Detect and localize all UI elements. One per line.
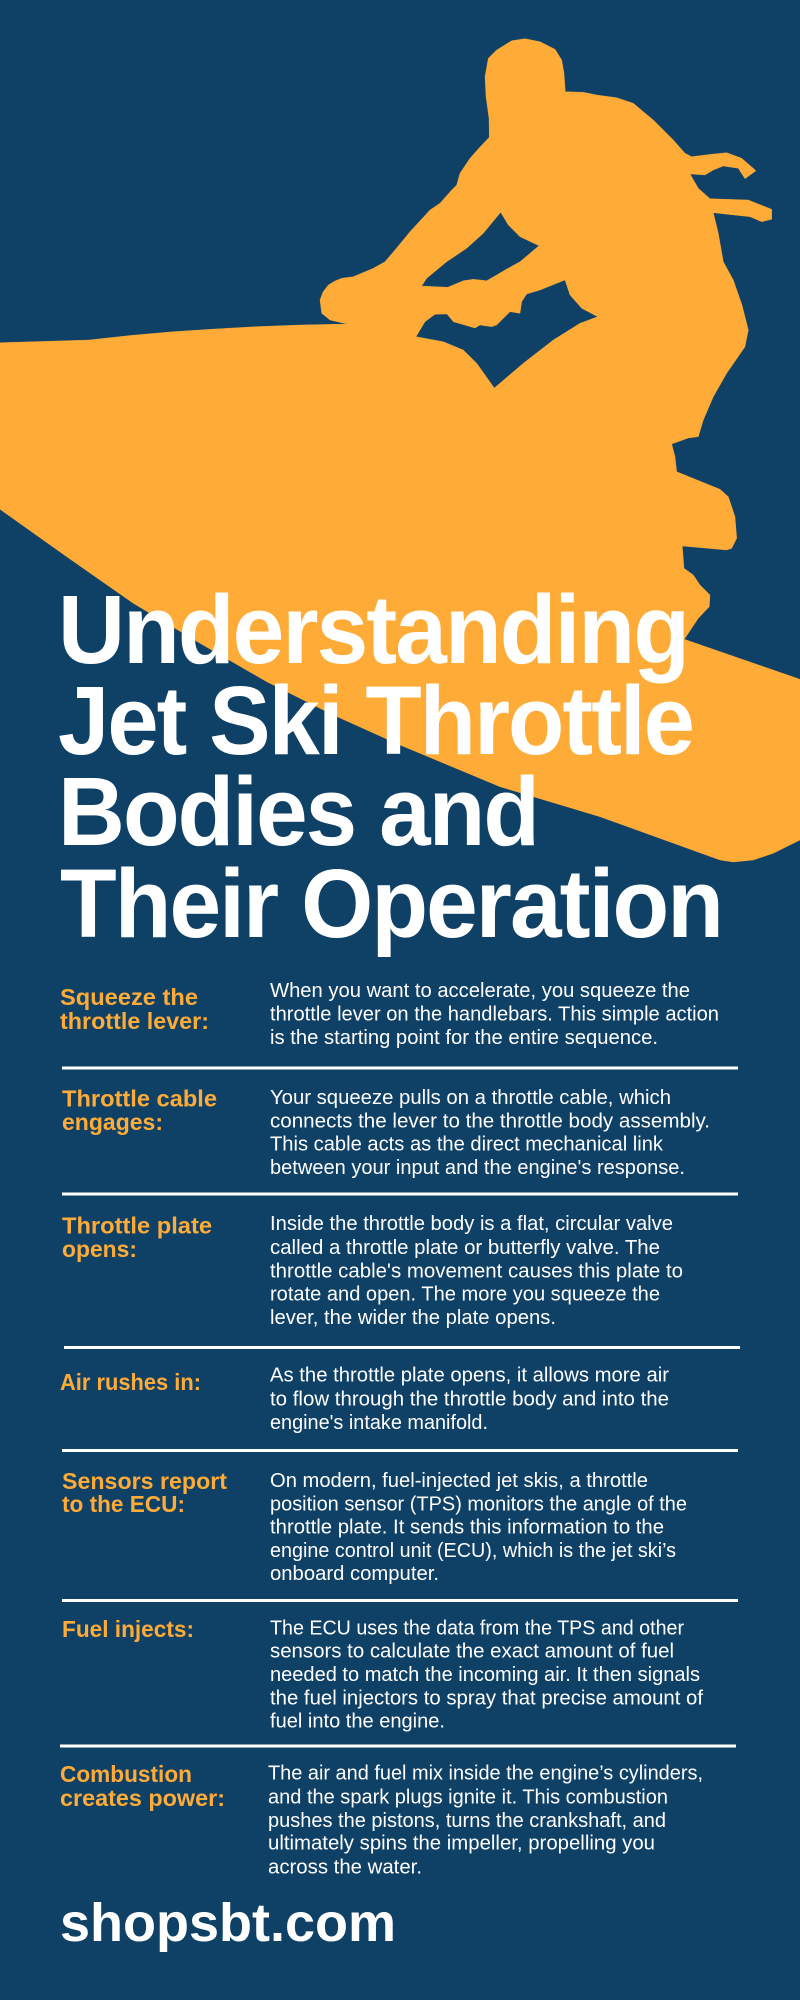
step 7 text xyxy=(268,1762,703,1878)
step 4 text: to flow through the throttle body and into the xyxy=(270,1388,669,1410)
step 4 text: As the throttle plate opens, it allows more air xyxy=(270,1364,669,1386)
step 5 text: position sensor (TPS) monitors the angle of the xyxy=(270,1494,687,1516)
step 2 text: connects the lever to the throttle body assembly. xyxy=(270,1110,710,1132)
title: Jet Ski Throttle xyxy=(58,666,693,775)
step 7: combustion creates power xyxy=(60,1761,703,1878)
step 7 text: The air and fuel mix inside the engine’s cylinders, xyxy=(268,1762,703,1784)
step 5: sensors report to the ECU xyxy=(62,1468,687,1585)
step 1: squeeze the throttle lever xyxy=(60,980,719,1049)
step 6 text xyxy=(270,1618,703,1732)
step 1 text: When you want to accelerate, you squeeze the xyxy=(270,980,690,1002)
step 3 text: called a throttle plate or butterfly valve. The xyxy=(270,1237,660,1259)
step 2 text xyxy=(270,1087,710,1179)
illustration: jet ski rider silhouette xyxy=(0,39,800,862)
step 3 text: Inside the throttle body is a flat, circular valve xyxy=(270,1213,673,1235)
step 1 heading: throttle lever: xyxy=(60,1008,209,1034)
step 3 text: rotate and open. The more you squeeze the xyxy=(270,1284,660,1306)
step 2 heading: engages: xyxy=(62,1109,163,1135)
step 5 text: onboard computer. xyxy=(270,1563,439,1585)
step 1 text xyxy=(270,980,719,1049)
step 3 text: throttle cable's movement causes this plate to xyxy=(270,1260,683,1282)
step 7 heading: creates power: xyxy=(60,1785,225,1811)
step 4: air rushes in xyxy=(60,1364,669,1434)
title: Understanding xyxy=(58,575,688,684)
step 5 heading xyxy=(62,1468,227,1517)
footer: website: shopsbt.com xyxy=(60,1893,396,1953)
step 6 text: The ECU uses the data from the TPS and other xyxy=(270,1618,684,1640)
step 2 text: This cable acts as the direct mechanical link xyxy=(270,1134,664,1156)
step 3: throttle plate opens xyxy=(62,1212,683,1329)
step 6 text: the fuel injectors to spray that precise amount of xyxy=(270,1688,703,1710)
step 7 text: ultimately spins the impeller, propelling you xyxy=(268,1832,655,1854)
step 7 text: and the spark plugs ignite it. This combustion xyxy=(268,1786,668,1808)
step 6 text: sensors to calculate the exact amount of fuel xyxy=(270,1640,674,1662)
step 1 text: is the starting point for the entire sequence. xyxy=(270,1027,658,1049)
step 2 text: between your input and the engine's response. xyxy=(270,1157,685,1179)
step 4 text xyxy=(270,1364,669,1434)
title: Bodies and xyxy=(58,757,538,866)
step 5 text: On modern, fuel-injected jet skis, a throttle xyxy=(270,1470,648,1492)
step 6 text: fuel into the engine. xyxy=(270,1710,445,1732)
step 2: throttle cable engages xyxy=(62,1086,710,1179)
step 3 text: lever, the wider the plate opens. xyxy=(270,1307,556,1329)
step 3 heading: Throttle plate xyxy=(62,1212,212,1238)
step 4 heading: Air rushes in: xyxy=(60,1369,201,1395)
step 2 heading xyxy=(62,1086,217,1135)
step 5 heading: Sensors report xyxy=(62,1468,227,1494)
title: Their Operation xyxy=(60,849,722,958)
step 1 heading: Squeeze the xyxy=(60,984,198,1010)
step 1 text: throttle lever on the handlebars. This simple action xyxy=(270,1004,719,1026)
step 2 heading: Throttle cable xyxy=(62,1086,217,1112)
step 7 heading: Combustion xyxy=(60,1761,192,1787)
title xyxy=(58,575,722,958)
step 3 heading xyxy=(62,1212,212,1262)
step 5 text: throttle plate. It sends this information to the xyxy=(270,1516,664,1538)
step 5 text: engine control unit (ECU), which is the jet ski’s xyxy=(270,1540,676,1562)
step 3 heading: opens: xyxy=(62,1236,137,1262)
step 6 text: needed to match the incoming air. It then signals xyxy=(270,1664,700,1686)
step 4 text: engine's intake manifold. xyxy=(270,1412,488,1434)
step 7 text: across the water. xyxy=(268,1856,422,1878)
step 2 text: Your squeeze pulls on a throttle cable, which xyxy=(270,1087,671,1109)
step 6 heading: Fuel injects: xyxy=(62,1616,194,1642)
step 7 text: pushes the pistons, turns the crankshaft, and xyxy=(268,1810,666,1832)
step 5 text xyxy=(270,1470,687,1585)
step 5 heading: to the ECU: xyxy=(62,1491,185,1517)
step 3 text xyxy=(270,1213,683,1329)
step 7 heading xyxy=(60,1761,225,1811)
step 1 heading xyxy=(60,984,209,1034)
step 6: fuel injects xyxy=(62,1616,703,1732)
